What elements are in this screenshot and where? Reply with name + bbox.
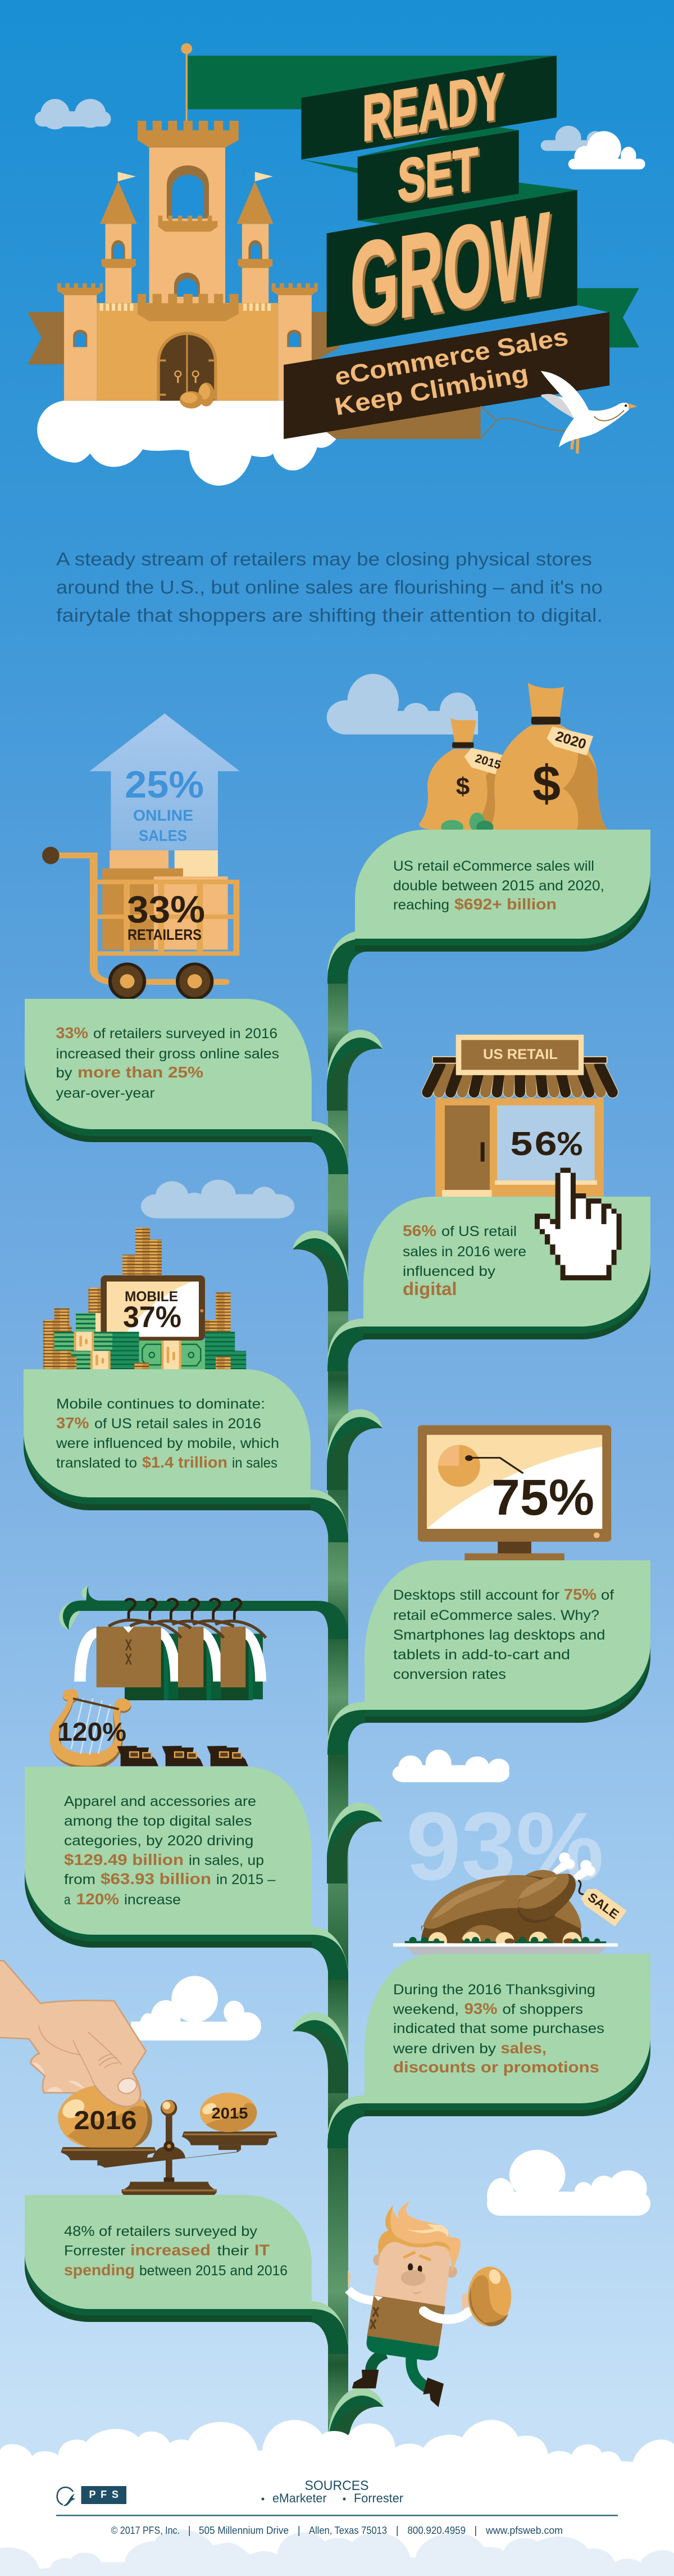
panel: desktop: retail eCommerce sales. Why? (393, 1608, 599, 1623)
panel: Thanksgiving: indicated that some purchases (393, 2021, 604, 2036)
lyre label: 120% (57, 1717, 126, 1746)
monitor label: 75% (491, 1470, 594, 1526)
subtitle: Keep Climbing (333, 360, 530, 421)
footer contact line: 505 Millennium Drive (199, 2525, 289, 2536)
intro text: around the U.S., but online sales are flourishing – and it's no (56, 577, 603, 597)
lyre (49, 1689, 131, 1769)
panel: mobile (24, 1369, 311, 1510)
cloud: behind money bags (327, 674, 478, 735)
panel: desktop: tablets in add-to-cart and (393, 1647, 570, 1663)
title: READY: READY (362, 59, 504, 155)
title: SET: SET (398, 134, 478, 215)
panel: Thanksgiving: 93% (464, 2000, 498, 2017)
sources: eMarketer (272, 2491, 327, 2505)
panel: apparel: $63.93 billion (101, 1870, 211, 1887)
panel: Thanksgiving: of shoppers (502, 2002, 583, 2017)
garments (74, 1627, 266, 1700)
panel: apparel: Apparel and accessories are (64, 1794, 256, 1809)
cloud: right of Jack (487, 2150, 650, 2216)
castle (57, 43, 318, 401)
subtitle (333, 323, 570, 421)
panel: IT spending: IT (254, 2242, 270, 2258)
coin stacks (43, 1228, 231, 1370)
sources: SOURCES (304, 2478, 368, 2493)
panel: Thanksgiving: discounts or promotions (393, 2058, 599, 2076)
far hand (327, 2271, 351, 2287)
cart label: 33% (127, 888, 205, 931)
hand and scale illustration (0, 1961, 277, 2195)
ears (373, 2254, 457, 2278)
legs (371, 2353, 428, 2388)
potatoes and greens (405, 1932, 606, 1951)
branch curl (59, 1586, 131, 1630)
panel: 56% digital (363, 1035, 650, 1339)
egg labels: 2016 (74, 2106, 137, 2135)
panel: eCommerce doubling: $692+ billion (454, 895, 557, 913)
panel: desktop: Smartphones lag desktops and (393, 1627, 605, 1643)
apparel illustration (49, 1586, 266, 1769)
cart label: RETAILERS (127, 926, 202, 943)
banner: READY (301, 56, 557, 160)
hand back (0, 1961, 146, 2093)
clothes rack branch (112, 1601, 348, 1639)
golden eggs at door (180, 383, 215, 409)
bag labels (456, 728, 588, 812)
boots (117, 1746, 248, 1766)
face (401, 2252, 431, 2294)
panel: Thanksgiving: sales, (501, 2039, 547, 2057)
scale (61, 2100, 277, 2195)
cloud: top right white (568, 131, 645, 169)
bag labels: 2020 (554, 728, 588, 753)
pale cloud footer (0, 2530, 674, 2576)
fingernails (32, 2063, 84, 2092)
hangers (108, 1599, 266, 1638)
subtitle: eCommerce Sales (333, 323, 570, 391)
panel: apparel: categories, by 2020 driving (64, 1833, 253, 1849)
panel: 56% digital: digital (403, 1279, 457, 1299)
panel: 56% digital: of US retail (441, 1224, 517, 1239)
tablet (101, 1275, 205, 1341)
cursor hand (535, 1167, 622, 1280)
panel: IT spending (25, 2195, 312, 2322)
panel: desktop: 75% (564, 1586, 596, 1603)
panel: eCommerce doubling: US retail eCommerce sales will (393, 858, 594, 874)
cloud: top right pale (541, 126, 604, 151)
beanstalk (253, 931, 427, 2469)
cloud: above coins (141, 1180, 294, 1219)
panel: desktop: Desktops still account for (393, 1587, 559, 1603)
bag labels: 2015 (473, 752, 503, 772)
bag labels: $ (532, 756, 561, 812)
golden egg (468, 2267, 511, 2326)
panel: desktop: conversion rates (393, 1667, 506, 1682)
egg 2015 (200, 2093, 257, 2132)
egg labels (74, 2104, 248, 2135)
panel: Thanksgiving: During the 2016 Thanksgiving (393, 1982, 595, 1998)
title: READY (362, 59, 506, 157)
panel: 33% retailers: more than 25% (78, 1063, 203, 1081)
panel: apparel: in sales, up (189, 1853, 264, 1868)
platter (393, 1943, 618, 1954)
panel: apparel: 120% (76, 1890, 119, 1908)
panel: mobile: were influenced by mobile, which (56, 1436, 279, 1451)
panel: mobile: 37% (56, 1414, 89, 1432)
panel: mobile: translated to (56, 1455, 137, 1471)
arrow label: 25% (125, 763, 204, 806)
banner: subtitle (284, 312, 609, 439)
money bags illustration (419, 682, 609, 841)
93% turkey illustration (393, 1792, 627, 1954)
panel: eCommerce doubling (355, 830, 650, 952)
panel: apparel: among the top digital sales (64, 1813, 252, 1829)
footer contact line: 800.920.4959 (408, 2525, 466, 2536)
cloud: above 93% (393, 1750, 509, 1782)
panel: Thanksgiving (365, 1954, 650, 2116)
panel: 56% digital: sales in 2016 were (403, 1244, 526, 1260)
hair (378, 2201, 461, 2272)
title: GROW (350, 188, 552, 352)
panel: 33% retailers (25, 999, 312, 1142)
thumb (39, 2025, 140, 2107)
egg 2016 (58, 2085, 152, 2148)
turkey body (421, 1870, 582, 1943)
panel: eCommerce doubling: reaching (393, 897, 449, 913)
panel: 56% digital: 56% (403, 1222, 436, 1239)
desktop monitor illustration (418, 1425, 611, 1561)
bag: 2015 (419, 718, 511, 830)
panel: 33% retailers: year-over-year (56, 1085, 155, 1101)
panel: Thanksgiving: weekend, (393, 2002, 459, 2017)
panel: apparel: $129.49 billion (64, 1851, 184, 1868)
footer contact line: Allen, Texas 75013 (309, 2525, 387, 2536)
title: SET: SET (399, 136, 480, 216)
ribbon: back tails (28, 56, 639, 439)
shopping cart illustration (42, 713, 240, 1000)
intro text: A steady stream of retailers may be closing physical stores (56, 549, 592, 569)
footer contact line: © 2017 PFS, Inc. (111, 2525, 180, 2536)
tag text: SALE (585, 1890, 622, 1922)
big 93%: 93% (406, 1792, 604, 1900)
Jack climbing with egg (327, 2201, 511, 2407)
panel: desktop: of (601, 1587, 614, 1603)
beans (441, 813, 494, 834)
bones (552, 1853, 596, 1881)
tablet label: MOBILE (125, 1289, 178, 1305)
boots (352, 2370, 444, 2407)
panel: IT spending: Forrester (64, 2243, 125, 2258)
panel: apparel: in 2015 – (216, 1872, 276, 1887)
bag: 2020 (485, 682, 609, 841)
panel: apparel: from (64, 1872, 95, 1887)
intro text (56, 549, 603, 626)
panel: 33% retailers: increased their gross online sales (56, 1046, 279, 1062)
title: SET (398, 134, 480, 216)
panel: mobile: $1.4 trillion (142, 1454, 227, 1471)
arrow label: SALES (139, 827, 187, 844)
mobile money illustration (43, 1228, 246, 1370)
panel: IT spending: spending (64, 2261, 135, 2279)
panel: mobile: Mobile continues to dominate: (56, 1396, 265, 1412)
panel: IT spending: their (217, 2243, 249, 2258)
panel: IT spending: 48% of retailers surveyed by (64, 2224, 258, 2239)
sources: Forrester (354, 2491, 403, 2505)
storefront (427, 1035, 613, 1198)
body (367, 2235, 452, 2361)
arrow (89, 713, 240, 850)
footer contact line (111, 2525, 563, 2536)
panel: mobile: of US retail sales in 2016 (94, 1416, 261, 1432)
arrow label (125, 763, 204, 844)
panel: 56% digital: influenced by (403, 1264, 496, 1279)
sources (262, 2478, 403, 2505)
egg labels: 2015 (211, 2104, 248, 2122)
PFS logo: P F S (89, 2489, 119, 2500)
panel: eCommerce doubling: double between 2015 and 2020, (393, 878, 604, 894)
title: READY: READY (364, 61, 506, 157)
banner: GROW (327, 190, 577, 347)
cash stacks (54, 1313, 246, 1370)
storefront: 56% (509, 1126, 582, 1166)
panel: apparel (25, 1767, 312, 1948)
panel: 33% retailers: of retailers surveyed in 2016 (93, 1026, 277, 1042)
panel: 33% retailers: 33% (56, 1024, 88, 1042)
panel: Thanksgiving: were driven by (393, 2041, 497, 2057)
sale tag (578, 1880, 627, 1926)
panel: mobile: in sales (232, 1455, 277, 1471)
arrow label: ONLINE (133, 807, 193, 824)
intro text: fairytale that shoppers are shifting their attention to digital. (56, 605, 603, 626)
panel: IT spending: increased (130, 2242, 211, 2258)
near hand (462, 2293, 468, 2312)
cart body (42, 846, 236, 1000)
white cloud footer (0, 2420, 674, 2576)
panel: desktop (365, 1560, 650, 1723)
footer contact line: www.pfsweb.com (485, 2525, 563, 2536)
cloud: top left (35, 99, 111, 129)
tablet label: 37% (123, 1301, 181, 1334)
panel: apparel: a (64, 1892, 71, 1908)
storefront: US RETAIL (483, 1047, 558, 1062)
panel: IT spending: between 2015 and 2016 (139, 2263, 288, 2279)
banner: SET (358, 130, 519, 220)
cloud under castle (37, 401, 336, 486)
panel: 33% retailers: by (56, 1065, 72, 1081)
bag labels: $ (456, 773, 470, 800)
panel: apparel: increase (124, 1892, 181, 1908)
near arm (423, 2311, 468, 2319)
cloud: behind hand (131, 1976, 261, 2040)
hero illustration (28, 43, 645, 486)
far arm (348, 2289, 375, 2301)
PFS logo (57, 2486, 126, 2506)
goose with rope (481, 371, 637, 454)
